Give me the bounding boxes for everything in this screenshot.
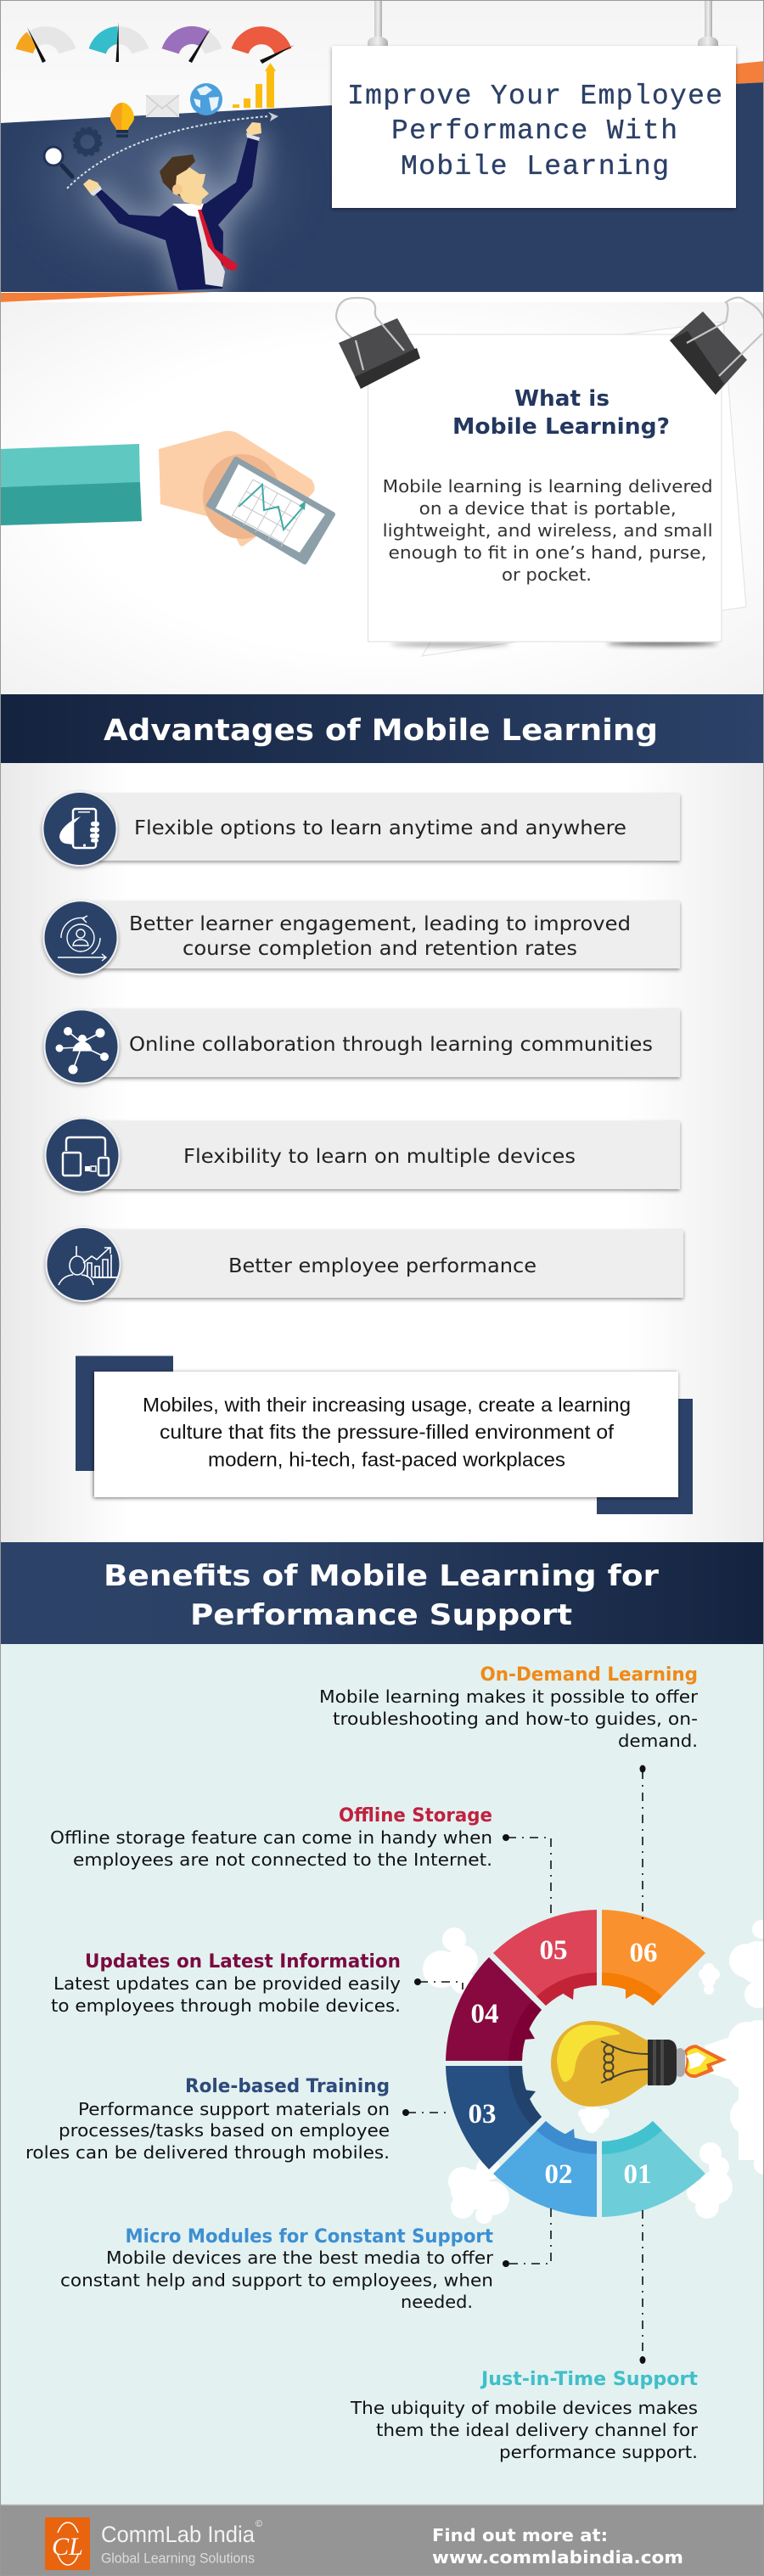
icon: globe <box>190 83 222 115</box>
text: just-in-time support <box>350 2369 699 2462</box>
heading band: benefits <box>0 1542 764 1644</box>
advantage 1: Flexible options to learn anytime and anywhere <box>134 817 626 839</box>
company name: Global Learning Solutions <box>101 2550 255 2567</box>
company name: © <box>256 2519 262 2529</box>
callout: learning culture <box>76 1356 693 1514</box>
text: role-based training <box>25 2076 390 2163</box>
segment 02: 02 <box>545 2159 572 2190</box>
company name: CommLab India <box>101 2522 256 2547</box>
company name <box>101 2519 262 2567</box>
segment 01: 01 <box>623 2159 652 2190</box>
hanging rods <box>368 0 718 46</box>
advantage 1 <box>42 792 680 866</box>
logo: CL <box>52 2533 83 2561</box>
segment 04 <box>446 1957 542 2061</box>
advantage 4: Flexibility to learn on multiple devices <box>183 1146 576 1168</box>
connector: offline storage to 05 <box>503 1834 551 1918</box>
text: offline storage: Offline storage feature can come in handy when <box>50 1827 492 1848</box>
heading band: advantages <box>0 694 764 763</box>
advantage 5: Better employee performance <box>228 1255 536 1277</box>
panel: advantages list <box>0 763 764 1542</box>
heading band: advantages: Advantages of Mobile Learning <box>104 714 658 748</box>
segment 06 <box>602 1910 705 2006</box>
icon: magnifier <box>44 147 72 177</box>
connector: role-based training to 03 <box>402 2109 451 2116</box>
heading band: benefits: Performance Support <box>190 1598 572 1632</box>
text: definition: or pocket. <box>502 564 592 585</box>
title sign: Performance With <box>391 115 677 147</box>
heading: what is mobile learning <box>452 386 670 440</box>
text: just-in-time support: them the ideal delivery channel for <box>376 2420 699 2440</box>
text: on-demand learning: troubleshooting and how-to guides, on- <box>333 1709 698 1729</box>
text: updates on latest information: Updates on Latest Information <box>85 1951 401 1973</box>
connector: on-demand learning to 06 <box>640 1765 645 1919</box>
man glow <box>47 110 276 290</box>
text: just-in-time support: The ubiquity of mobile devices makes <box>350 2398 698 2418</box>
connector: micro modules to 02 <box>503 2208 551 2267</box>
icon: multiple devices <box>63 1137 109 1176</box>
text: role-based training: processes/tasks based on employee <box>59 2120 390 2141</box>
panel: what is mobile learning <box>0 292 764 694</box>
title sign: Improve Your Employee <box>347 81 722 112</box>
segment 03 <box>446 2066 542 2169</box>
text: micro modules: needed. <box>401 2292 473 2312</box>
text: role-based training: Role-based Training <box>185 2076 390 2097</box>
illustration: hand holding phone <box>0 431 333 562</box>
text: role-based training: Performance support materials on <box>78 2099 390 2119</box>
heading: what is mobile learning: What is <box>514 386 610 412</box>
panel: header banner <box>0 0 764 302</box>
text: on-demand learning: demand. <box>618 1731 698 1751</box>
text: updates on latest information: Latest updates can be provided easily <box>53 1973 401 1994</box>
heading: what is mobile learning: Mobile Learning? <box>452 414 670 440</box>
segment 02 <box>493 2121 597 2217</box>
text: on-demand learning <box>319 1664 699 1751</box>
advantage 3 <box>44 1009 680 1083</box>
icon: binder clip left <box>336 298 420 389</box>
segment 06: 06 <box>630 1938 657 1968</box>
arrow: dotted arc <box>67 112 278 188</box>
call to action: Find out more at: <box>432 2525 608 2545</box>
text: micro modules <box>60 2226 494 2312</box>
icon: envelope <box>146 95 179 117</box>
connector: just-in-time support to 01 <box>640 2210 645 2364</box>
text: definition: on a device that is portable, <box>419 498 677 519</box>
text: updates on latest information: to employees through mobile devices. <box>51 1995 401 2016</box>
advantage 2 <box>44 901 680 974</box>
text: role-based training: roles can be delivered through mobiles. <box>25 2142 390 2163</box>
callout: learning culture: modern, hi-tech, fast-paced workplaces <box>208 1448 565 1470</box>
advantage 2: Better learner engagement, leading to improved <box>129 913 631 935</box>
text: offline storage <box>50 1805 492 1870</box>
segment 01 <box>602 2121 705 2217</box>
segment 05: 05 <box>540 1935 567 1966</box>
icon: gear <box>75 129 100 154</box>
icon: binder clip right <box>670 297 764 395</box>
text: definition: lightweight, and wireless, and small <box>383 520 713 541</box>
advantage 5 <box>46 1227 683 1301</box>
panel: benefits <box>0 1644 764 2505</box>
call to action: www.commlabindia.com <box>432 2547 683 2568</box>
connector: updates to 04 <box>414 1978 463 1990</box>
callout: learning culture: Mobiles, with their increasing usage, create a learning <box>143 1394 631 1416</box>
text: offline storage: Offline Storage <box>339 1805 492 1827</box>
text: micro modules: constant help and support to employees, when <box>60 2270 493 2290</box>
logo <box>45 2517 90 2570</box>
text: definition <box>383 476 713 585</box>
text: on-demand learning: Mobile learning makes it possible to offer <box>319 1686 699 1707</box>
footer <box>0 2504 764 2576</box>
text: just-in-time support: Just-in-Time Support <box>480 2369 698 2390</box>
icon: employee performance <box>59 1246 117 1285</box>
text: updates on latest information <box>51 1951 401 2016</box>
text: just-in-time support: performance support. <box>499 2442 698 2462</box>
icon: light bulb <box>110 103 134 137</box>
gauges row <box>25 22 295 64</box>
text: micro modules: Mobile devices are the best media to offer <box>106 2248 494 2268</box>
heading band: benefits: Benefits of Mobile Learning for <box>104 1559 659 1593</box>
illustration: businessman <box>83 122 261 290</box>
segment 04: 04 <box>470 1999 499 2029</box>
title sign: Mobile Learning <box>401 151 669 182</box>
text: offline storage: employees are not connected to the Internet. <box>73 1849 492 1870</box>
icon: community network <box>56 1027 109 1074</box>
clouds <box>423 1920 764 2224</box>
advantage 2: course completion and retention rates <box>183 938 577 960</box>
advantage 4 <box>46 1119 680 1192</box>
icon: rocket light bulb <box>551 2021 727 2107</box>
text: on-demand learning: On-Demand Learning <box>480 1664 698 1686</box>
segment 03: 03 <box>469 2099 496 2130</box>
text: micro modules: Micro Modules for Constant Support <box>126 2226 493 2248</box>
text: definition: Mobile learning is learning delivered <box>383 476 713 497</box>
icon: bar chart arrow <box>233 63 276 108</box>
radial diagram <box>446 1910 705 2217</box>
icon: learner cycle <box>58 916 106 961</box>
advantage 3: Online collaboration through learning communities <box>129 1034 653 1056</box>
callout: learning culture: culture that fits the pressure-filled environment of <box>160 1421 615 1443</box>
segment 05 <box>493 1910 597 2006</box>
icon: hand with phone <box>59 809 99 848</box>
text: definition: enough to fit in one’s hand, purse, <box>389 542 706 563</box>
note paper stack <box>368 322 746 656</box>
call to action <box>432 2525 683 2568</box>
title sign <box>332 46 736 208</box>
